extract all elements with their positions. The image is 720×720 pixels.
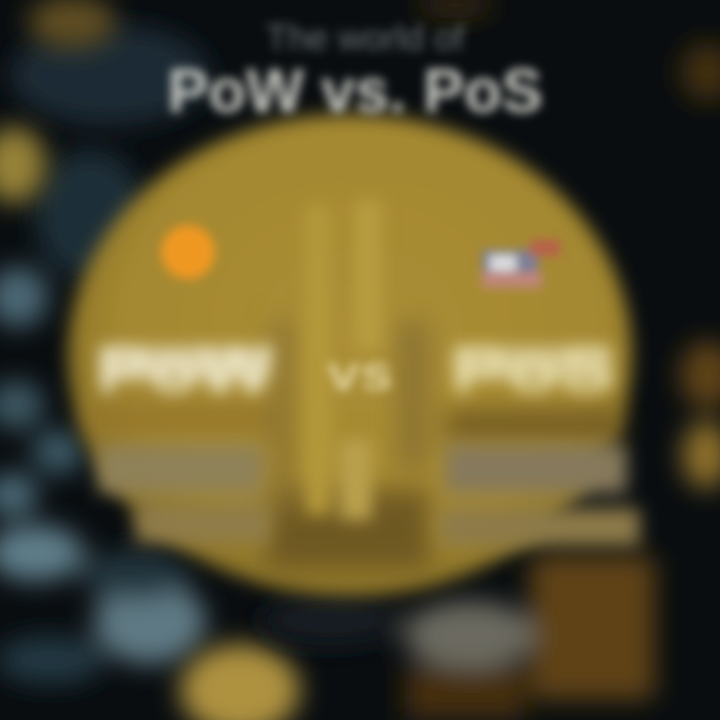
left label	[96, 332, 275, 543]
coin shading	[90, 320, 620, 570]
PoS description	[440, 445, 640, 546]
right label	[440, 332, 640, 546]
PoS heading: PoS	[450, 332, 616, 406]
centre versus label: vs	[327, 345, 393, 401]
title line two: PoW vs. PoS	[168, 57, 542, 126]
main gold coin	[68, 114, 632, 596]
PoW description	[98, 445, 270, 543]
centre symbol bars	[305, 200, 382, 520]
title line one: The world of	[266, 17, 465, 58]
background coins: right bronze stack	[260, 341, 720, 720]
coin body	[68, 114, 632, 596]
icon: orange circle for PoW	[161, 225, 215, 279]
PoW heading: PoW	[96, 332, 275, 406]
icon: flag for PoS	[482, 240, 560, 288]
title	[168, 17, 542, 126]
background coins: left slate stack	[0, 25, 210, 684]
